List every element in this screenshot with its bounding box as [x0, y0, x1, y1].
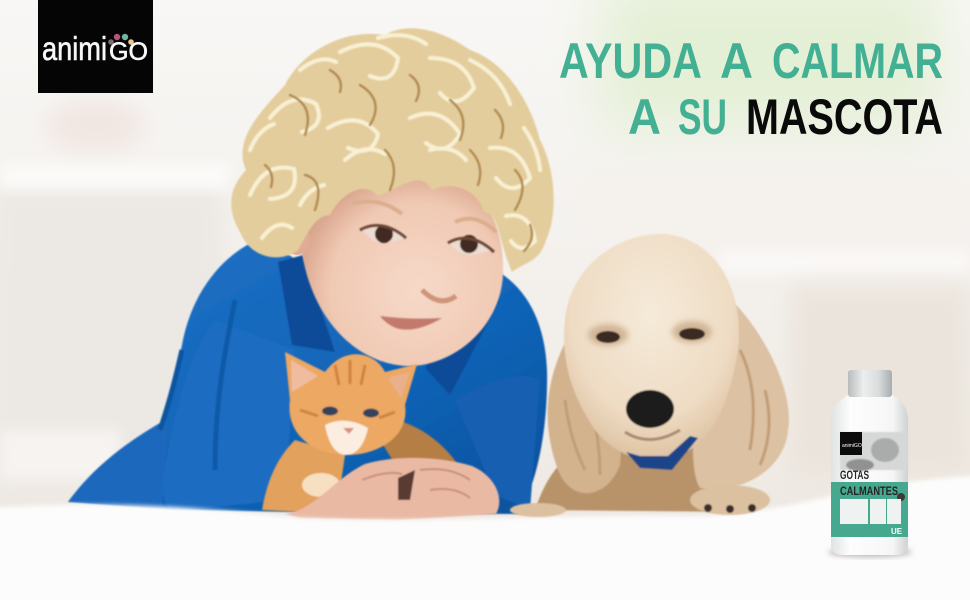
product name: GOTAS: [840, 468, 869, 482]
boy: blue shirt: [68, 238, 547, 514]
label black logo: [840, 432, 862, 455]
headline line 2 green: A: [628, 89, 661, 145]
puppy: blue collar: [626, 436, 698, 470]
kitten: nose: [343, 428, 354, 434]
puppy: eye shading: [588, 321, 712, 346]
boy: face: [300, 165, 503, 366]
EU mark: UE: [891, 527, 903, 536]
boy: ear: [284, 225, 310, 255]
puppy: body: [535, 445, 745, 512]
bottle cap: [848, 370, 892, 397]
kitten: eyes: [322, 406, 379, 418]
label star icon: [897, 493, 905, 501]
logo wordmark: GO: [109, 38, 148, 66]
boy: eyes: [352, 202, 496, 255]
puppy: [535, 234, 789, 512]
product bottle: [828, 370, 912, 557]
kitten: [262, 352, 458, 512]
puppy: nose: [626, 390, 674, 428]
boy: nose and mouth: [380, 290, 456, 330]
product name: CALMANTES: [840, 484, 898, 498]
logo box: [38, 0, 153, 93]
headline line 2 green: [628, 89, 727, 145]
label green band: [831, 482, 908, 537]
bottle body: [831, 394, 908, 555]
headline line 1: [559, 33, 943, 89]
puppy: left ear: [548, 320, 621, 493]
headline line 2 green: SU: [678, 89, 727, 145]
puppy: eyes: [596, 328, 705, 343]
label black logo: animiGO: [842, 443, 862, 449]
puppy: mouth: [625, 430, 680, 440]
boy: hand: [285, 458, 499, 520]
logo wordmark: animi: [42, 30, 107, 67]
headline line 1: AYUDA: [559, 33, 702, 89]
label grey photo: [840, 432, 908, 471]
boy: [68, 28, 554, 514]
puppy: right ear: [693, 285, 789, 489]
kitten: paw: [302, 473, 340, 497]
boy: curly blond hair: [231, 28, 554, 272]
product name: [840, 468, 898, 498]
puppy: paws: [510, 485, 770, 517]
headline line 1: A: [720, 33, 753, 89]
puppy: head: [564, 234, 739, 461]
logo paw dots: [108, 34, 134, 45]
headline: [559, 33, 943, 145]
label info boxes: [840, 499, 901, 524]
white fluffy carpet: [0, 476, 970, 600]
